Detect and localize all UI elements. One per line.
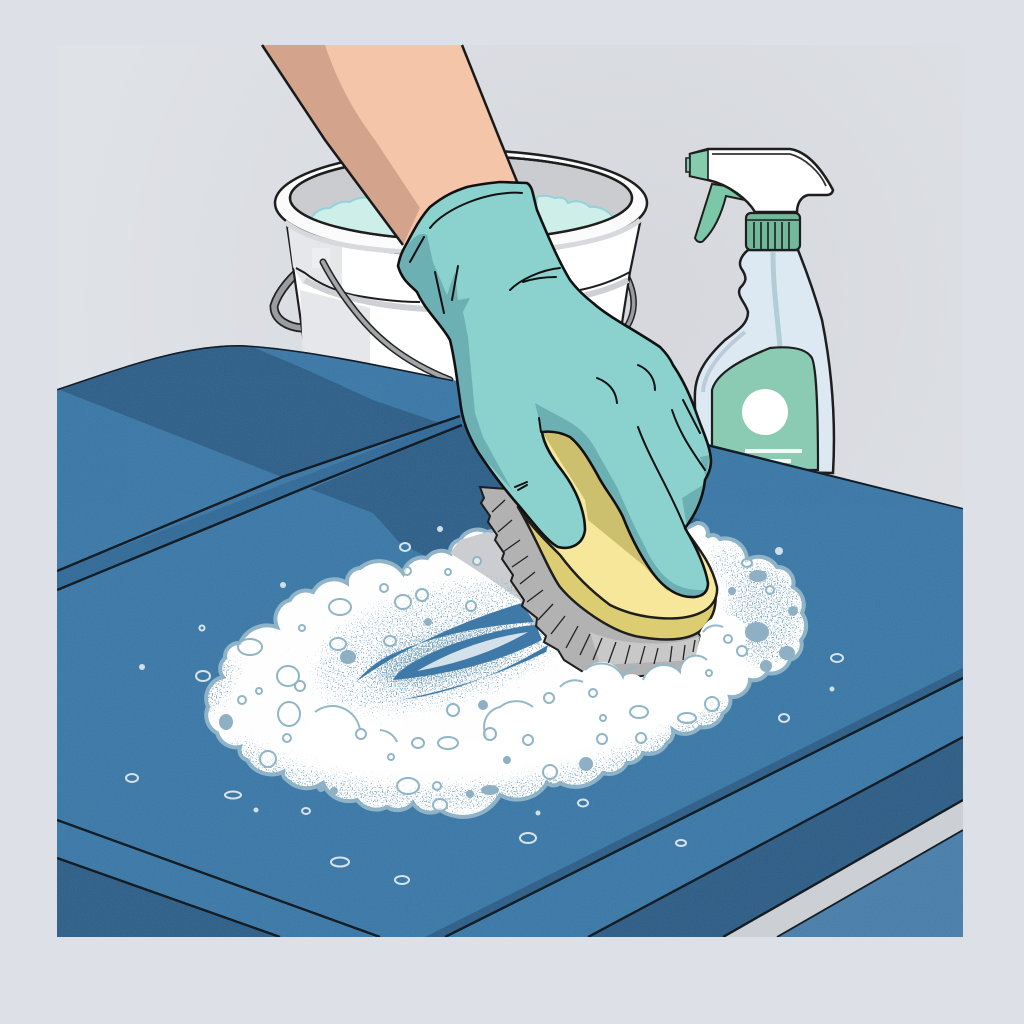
bucket wire handle xyxy=(323,262,450,380)
seat shadow from hand xyxy=(310,425,700,556)
foam stipple xyxy=(212,540,807,798)
cloud arcs xyxy=(315,625,723,742)
glove outline xyxy=(398,182,711,597)
sofa base fill xyxy=(57,340,963,940)
spray bottle xyxy=(686,149,834,473)
foam body xyxy=(206,523,806,817)
arm outlines xyxy=(262,45,518,245)
fabric grain xyxy=(57,340,963,940)
filled foam spots xyxy=(219,570,798,798)
bucket rim xyxy=(275,150,647,256)
foam patch xyxy=(206,523,807,817)
loose droplets on fabric xyxy=(126,543,843,884)
sofa outlines xyxy=(57,345,963,937)
bucket interior xyxy=(290,156,632,240)
cloud fill xyxy=(290,615,745,772)
grey trim strip xyxy=(723,800,963,937)
bucket body shadow xyxy=(288,228,370,400)
seam band xyxy=(57,416,462,590)
label lines xyxy=(745,449,802,463)
spray head xyxy=(690,149,833,212)
front foam cloud xyxy=(290,615,745,772)
bristles xyxy=(480,487,700,680)
streak highlight xyxy=(417,632,528,671)
pail inner outline xyxy=(290,156,632,240)
arm shadow xyxy=(262,45,420,245)
bottle collar xyxy=(746,213,800,250)
front seam shadow xyxy=(425,668,963,937)
glove shading xyxy=(398,234,710,597)
front panel dark band xyxy=(588,737,963,937)
bucket handle left loop xyxy=(274,262,310,328)
illustration: gloved hand scrubbing a sofa cushion xyxy=(57,44,963,937)
rubber glove xyxy=(398,182,711,597)
bucket lip line xyxy=(296,268,630,302)
glove creases xyxy=(410,193,705,528)
dirt streaks xyxy=(357,603,548,700)
brush block top xyxy=(518,425,717,618)
back cushion shadow xyxy=(60,346,460,477)
bristle strands xyxy=(492,500,695,664)
bucket xyxy=(274,150,647,400)
sofa xyxy=(57,340,963,940)
small droplet dots xyxy=(139,526,834,816)
brush block shaded area xyxy=(542,432,668,592)
soapy water xyxy=(311,194,614,236)
nozzle xyxy=(686,150,708,180)
label circle xyxy=(742,389,788,435)
arm xyxy=(262,45,520,245)
scrub brush xyxy=(480,425,717,680)
bottle body xyxy=(695,250,834,473)
bracket xyxy=(312,248,330,268)
front edge left dark xyxy=(57,858,280,937)
bristle light patch xyxy=(590,632,700,665)
rim shade xyxy=(285,220,640,253)
foam bubbles xyxy=(238,557,774,811)
bottom right panel xyxy=(777,830,963,937)
brush block side xyxy=(518,507,716,639)
bucket handle right loop xyxy=(623,277,634,332)
dip tube xyxy=(773,252,780,348)
trigger xyxy=(695,184,745,242)
bottle label xyxy=(712,347,818,470)
foam shadow xyxy=(450,532,540,650)
bucket body xyxy=(287,223,640,400)
